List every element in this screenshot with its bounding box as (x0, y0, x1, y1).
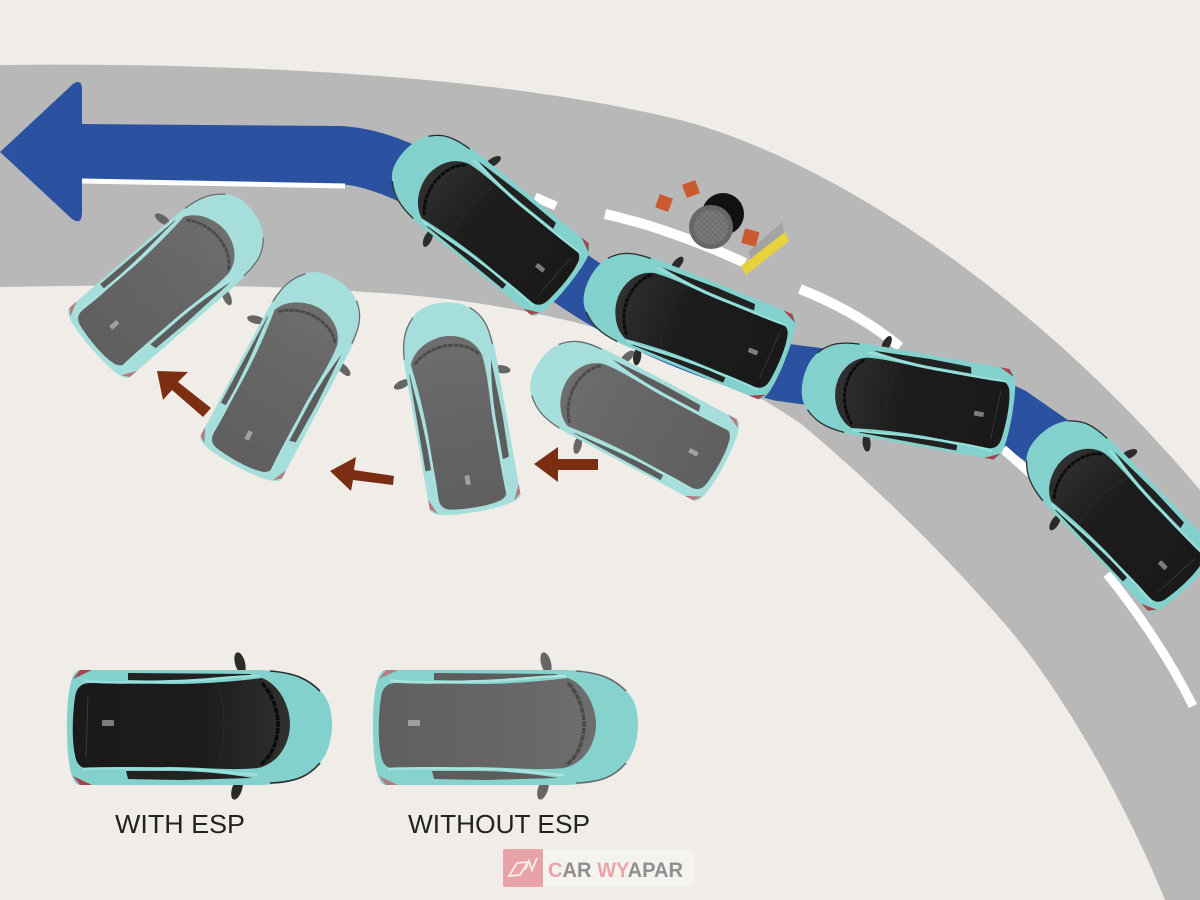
legend car: with ESP (67, 651, 332, 801)
arrow: skid direction 1 (534, 447, 598, 482)
cone (655, 194, 673, 212)
watermark logo mark (509, 858, 537, 876)
arrow: skid direction 3 (157, 371, 211, 417)
car without ESP: position 4 (52, 164, 291, 393)
car with ESP: position 2 (565, 227, 807, 417)
watermark: Car Wyapar (503, 849, 695, 887)
car with ESP: position 3 (792, 321, 1022, 476)
cone (682, 180, 700, 198)
arrow: skid direction 2 (330, 457, 394, 491)
car without ESP: position 1 (508, 313, 752, 519)
blue arrow: ESP path (0, 82, 1060, 450)
legend label: without ESP: WITHOUT ESP (408, 809, 590, 839)
legend car: without ESP (373, 651, 638, 801)
car with ESP: position 4 (997, 393, 1200, 629)
car with ESP: position 1 (365, 107, 605, 333)
road centre dashes (82, 181, 1193, 706)
watermark text: CAR WYAPAR (548, 859, 683, 882)
car without ESP: position 2 (380, 293, 535, 522)
car without ESP: position 3 (182, 250, 388, 494)
manhole cover (689, 205, 733, 249)
legend label: with ESP: WITH ESP (115, 809, 245, 839)
yellow barrier (741, 232, 789, 275)
cone (741, 228, 760, 247)
open hole (702, 193, 744, 235)
barrier shadow (748, 222, 785, 262)
road hazard: manhole and cones (655, 180, 789, 275)
